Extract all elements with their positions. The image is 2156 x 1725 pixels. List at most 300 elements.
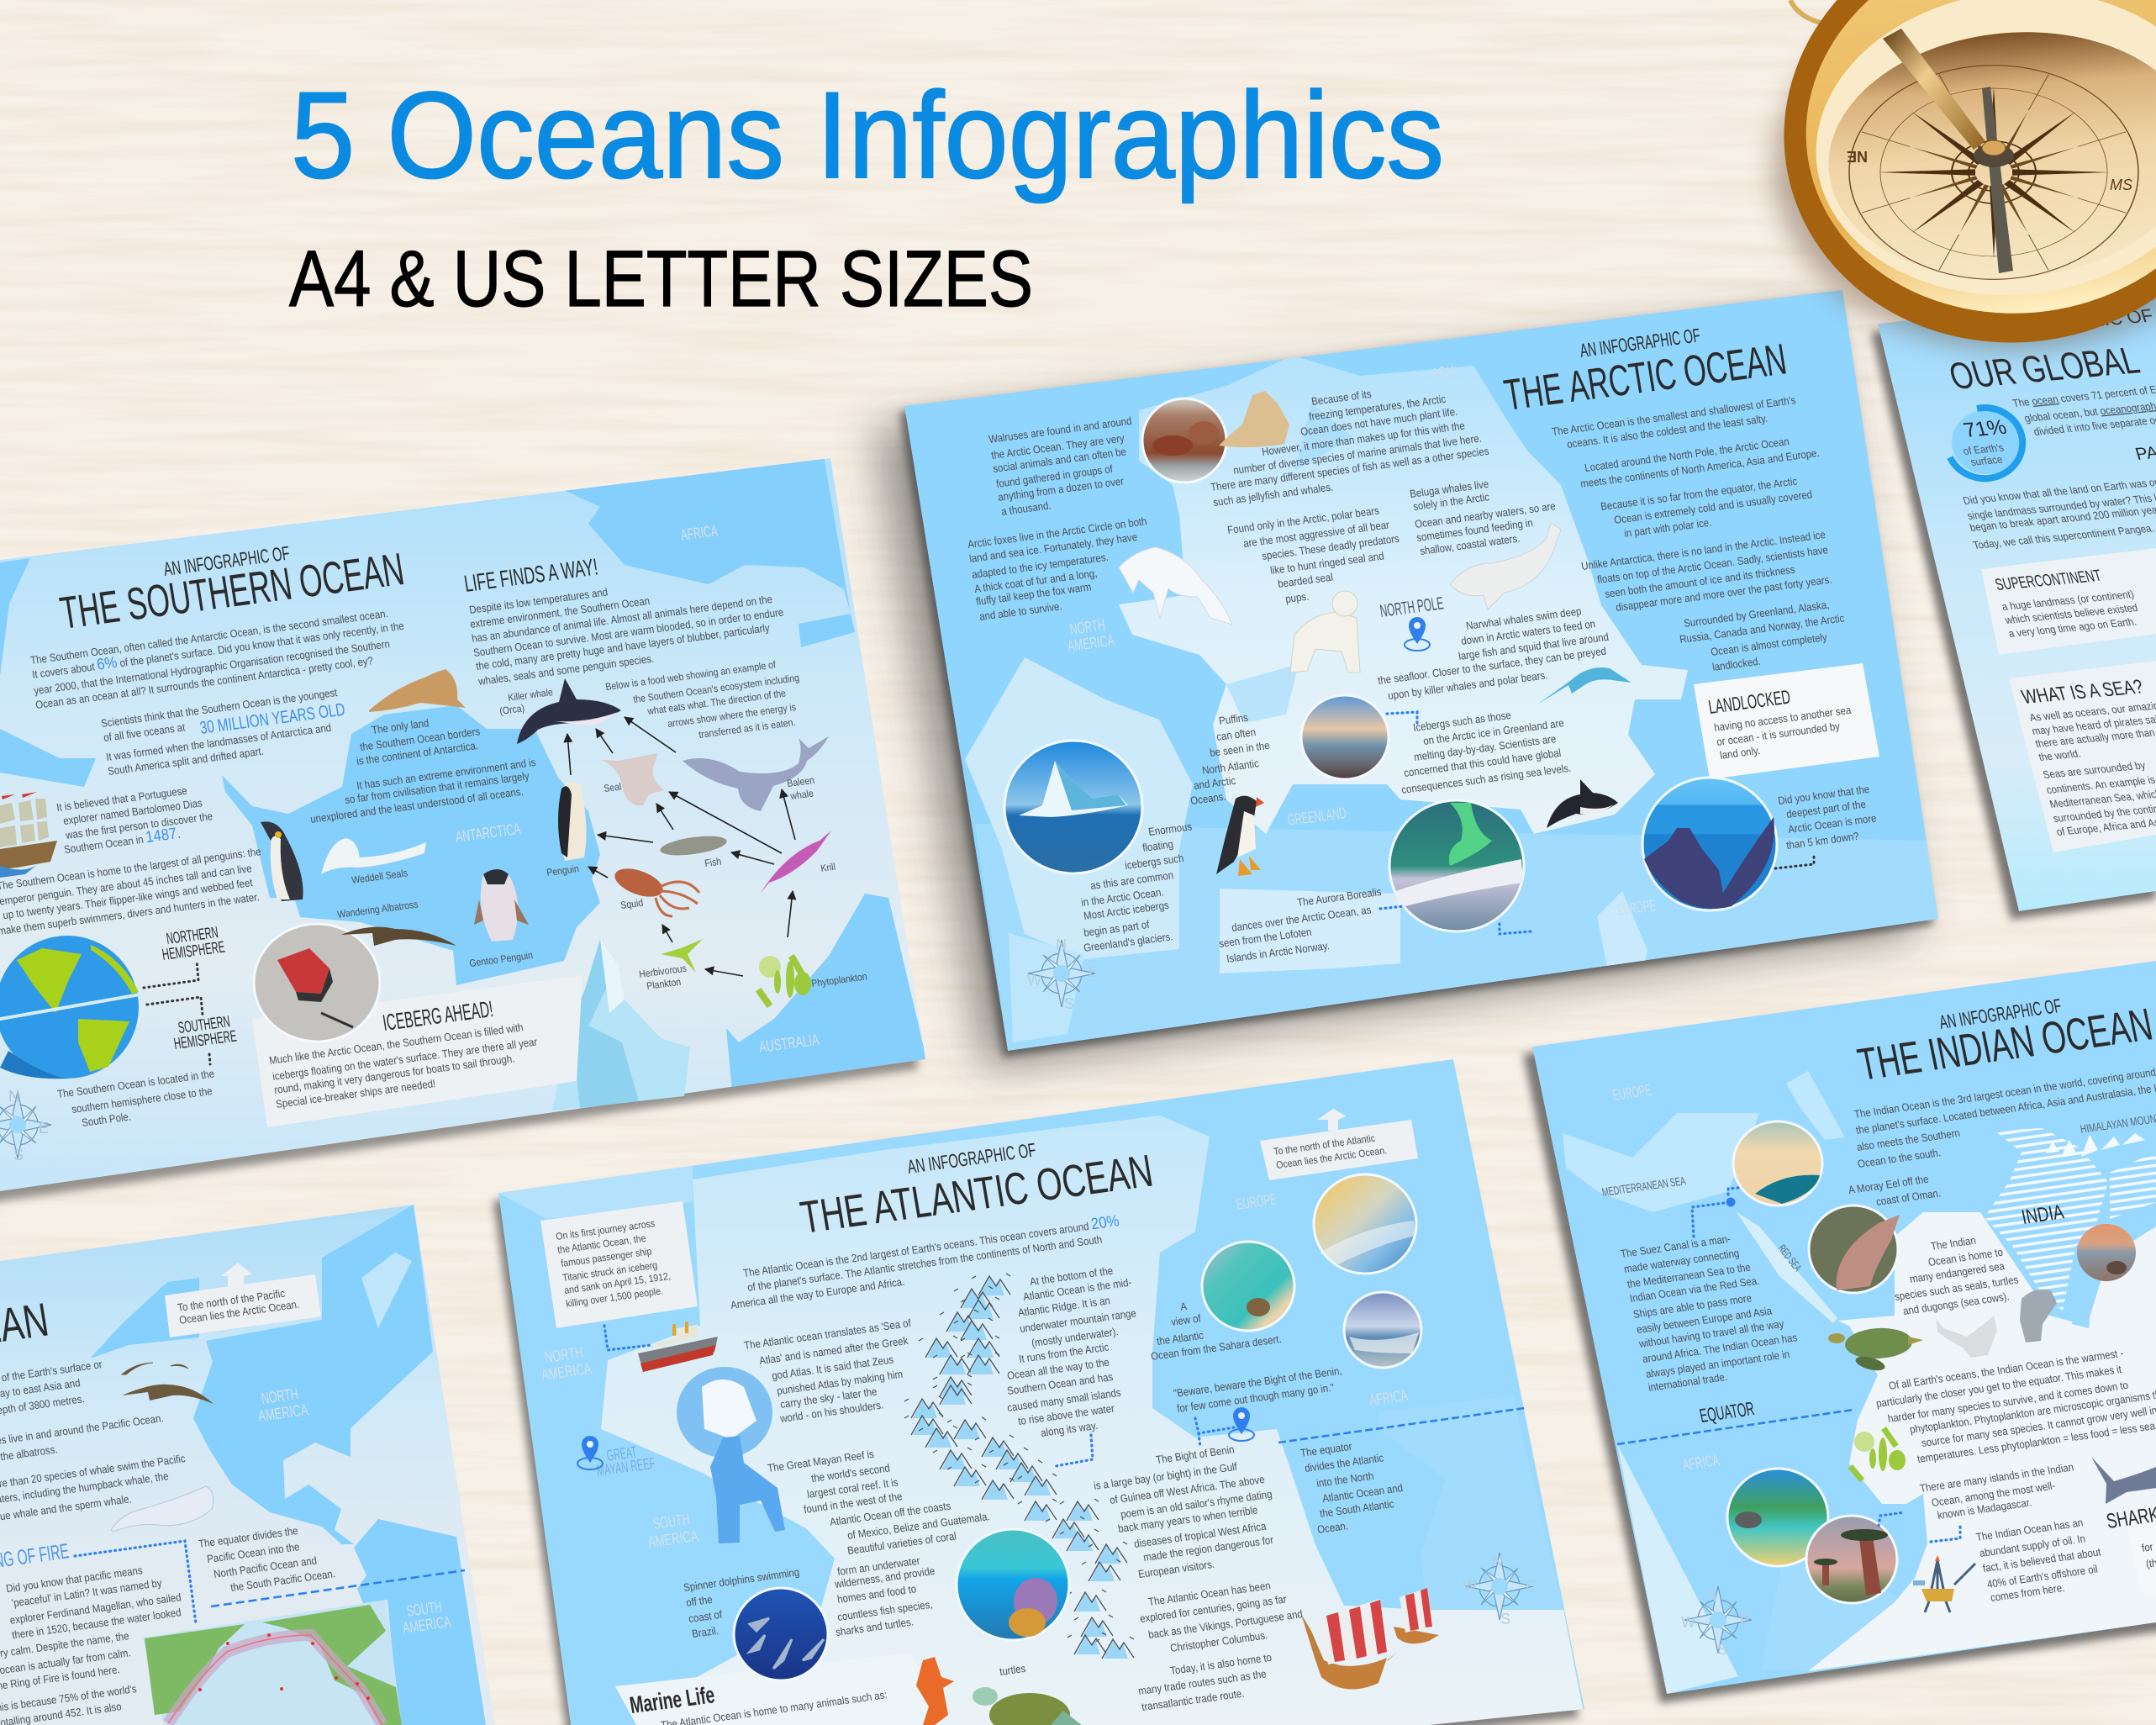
- iceberg illustration: [552, 939, 690, 1110]
- panel: Supercontinent definition: which scientists believe existed: [2003, 602, 2139, 626]
- intro text: The Arctic Ocean is the smallest and shallowest of Earth's: [1551, 393, 1796, 438]
- chart: 71 percent donut: 71%: [1961, 415, 2010, 442]
- Pangea text: [1962, 475, 2156, 551]
- chart: 71 percent donut: of Earth's: [1962, 441, 2006, 457]
- title block: AN INFOGRAPHIC OF: [906, 1139, 1037, 1178]
- world map: ring of fire: [143, 1600, 402, 1725]
- panel: Marine Life: Marine Life: [628, 1681, 716, 1718]
- intro text: Ocean to the south.: [1857, 1147, 1942, 1170]
- Great Mayan Reef text: The Great Mayan Reef is: [767, 1448, 875, 1474]
- title block: [1501, 324, 1790, 420]
- continent labels: ASIA: [1430, 362, 1458, 383]
- food web labels: Gentoo Penguin: [469, 951, 534, 969]
- title block: AN INFOGRAPHIC OF: [1937, 994, 2064, 1033]
- panel: Landlocked definition: [1694, 663, 1879, 779]
- iceberg text: Enormous: [1147, 820, 1193, 838]
- photo: Sahara beach: [1202, 1242, 1294, 1331]
- panel: Our Global Ocean sheet: [1871, 294, 2156, 920]
- beluga text: [1409, 477, 1557, 557]
- panel: sharks: for: [2141, 1541, 2154, 1554]
- Antarctica text: unexplored and the least understood of all oceans.: [309, 785, 525, 826]
- title block: THE SOUTHERN OCEAN: [57, 544, 408, 639]
- title block: AN INFOGRAPHIC OF: [1579, 324, 1701, 361]
- iceberg text: [1080, 820, 1193, 954]
- intro text: Ocean as an ocean at all? It surrounds the continent Antarctica - pretty cool, ey?: [34, 654, 374, 711]
- youngest ocean text: Scientists think that the Southern Ocean is the youngest: [100, 686, 339, 730]
- icon: compass rose: E: [1526, 1578, 1536, 1595]
- islands text: There are many islands in the Indian: [1919, 1461, 2074, 1495]
- panel: Supercontinent definition: SUPERCONTINENT: [1993, 567, 2104, 594]
- Bight of Benin text: The Bight of Benin: [1155, 1443, 1236, 1466]
- dolphins caption: coast of: [688, 1608, 724, 1625]
- food web caption: what eats what. The direction of the: [646, 688, 787, 717]
- panel: The Atlantic Ocean sheet: [493, 1059, 1586, 1725]
- intro text: Because it is so far from the equator, the Arctic: [1600, 475, 1798, 513]
- icon: compass rose: N: [1706, 1588, 1717, 1605]
- food web arrows: [567, 717, 795, 976]
- plant life text: Because of its: [1310, 388, 1373, 408]
- Bartolomeo Dias text: It is believed that a Portuguese: [55, 784, 188, 814]
- icon: compass rose: W: [1681, 1614, 1695, 1631]
- arctic fox text: land and sea ice. Fortunately, they have: [968, 530, 1138, 565]
- polar bear text: Found only in the Arctic, polar bears: [1226, 504, 1380, 536]
- continent labels: NORTH: [543, 1344, 584, 1367]
- icon: compass rose: N: [1056, 936, 1067, 953]
- location text: southern hemisphere close to the: [71, 1084, 213, 1116]
- hemisphere labels: HEMISPHERE: [173, 1027, 238, 1053]
- Sahara caption: view of: [1170, 1312, 1202, 1328]
- animal: krill: [761, 831, 831, 893]
- Great Mayan Reef text: wilderness, and provide: [833, 1564, 936, 1590]
- icon: compass rose: [1681, 1586, 1752, 1658]
- Atlas text: world - on his shoulders.: [778, 1399, 884, 1425]
- equator text: North Pacific Ocean and: [213, 1554, 318, 1580]
- intro text: seen both the amount of ice and its thickness: [1604, 563, 1796, 600]
- hemisphere labels: NORTHERN: [166, 924, 219, 948]
- iceberg text: as this are common: [1089, 869, 1174, 892]
- photo: Greenland coast: [1301, 695, 1389, 779]
- Antarctica text: so far from civilisation that it remains largely: [344, 769, 530, 806]
- walrus text: found gathered in groups of: [995, 462, 1114, 490]
- melting ice text: Icebergs such as those: [1412, 709, 1512, 734]
- title block: THE ATLANTIC OCEAN: [797, 1146, 1157, 1243]
- beluga text: Beluga whales live: [1409, 477, 1489, 500]
- ring of fire text: [0, 1564, 182, 1725]
- panel: Marine Life: turtles: [999, 1662, 1026, 1678]
- callout: Titanic: [540, 1201, 698, 1328]
- animal: squid: [611, 863, 699, 916]
- warmest ocean text: Of all Earth's oceans, the Indian Ocean is the warmest -: [1888, 1347, 2125, 1392]
- Atlas text: Atlas' and is named after the Greek: [758, 1334, 909, 1367]
- Great Mayan Reef text: the world's second: [810, 1462, 891, 1485]
- continent labels: SOUTH: [651, 1511, 691, 1533]
- equator text: divides the Atlantic: [1304, 1452, 1384, 1474]
- exploration text: back as the Vikings, Portuguese and: [1147, 1607, 1304, 1641]
- Atlas text: carry the sky - later the: [779, 1385, 878, 1411]
- panel: Supercontinent definition: a very long time ago on Earth.: [2007, 615, 2138, 640]
- intro text: [0, 1358, 186, 1524]
- continent labels: AMERICA: [402, 1613, 452, 1638]
- narwhal text: the seafloor. Closer to the surface, they can be preyed: [1377, 645, 1607, 687]
- plant life text: [1210, 388, 1489, 509]
- photo: coral reef: [957, 1529, 1069, 1640]
- food web labels: Fish: [704, 857, 722, 869]
- iceberg text: icebergs such: [1124, 852, 1184, 872]
- icon: compass rose: W: [1027, 972, 1041, 989]
- arctic fox text: [967, 515, 1147, 623]
- Antarctica text: The only land: [371, 716, 430, 736]
- panel: Landlocked definition: LANDLOCKED: [1707, 686, 1792, 718]
- iceberg text: Greenland's glaciers.: [1083, 931, 1173, 954]
- animal: gentoo penguin: [474, 869, 529, 942]
- intro text: Located around the North Pole, the Arctic Ocean: [1584, 435, 1790, 474]
- islands text: [1919, 1461, 2074, 1522]
- panel: The Southern Ocean sheet: [0, 456, 927, 1204]
- panel: Supercontinent definition: a huge landmass (or continent): [2000, 588, 2136, 613]
- mid-Atlantic ridge text: along its way.: [1040, 1419, 1099, 1439]
- animal: penguin in food web: [558, 782, 587, 861]
- panel: Iceberg ahead: [252, 975, 582, 1127]
- food web labels: Weddell Seals: [351, 868, 409, 886]
- panel: The Indian Ocean sheet: [1523, 961, 2156, 1703]
- icon: compass rose: W: [1463, 1578, 1477, 1595]
- oil text: 40% of Earth's offshore oil: [1986, 1563, 2099, 1590]
- icon: compass rose: E: [1740, 1612, 1750, 1628]
- Suez canal text: without having to travel all the way: [1637, 1317, 1785, 1350]
- photo: tropical beach: [1727, 1469, 1828, 1566]
- animal: seal: [602, 753, 664, 805]
- animal: killer whale: [517, 678, 621, 744]
- Bight of Benin text: diseases of tropical West Africa: [1133, 1520, 1268, 1550]
- hemisphere labels: SOUTHERN: [177, 1013, 231, 1037]
- life finds a way text: Despite its low temperatures and: [468, 586, 609, 616]
- food web caption: [605, 660, 800, 741]
- food web caption: arrows show where the energy is: [667, 702, 797, 730]
- Bartolomeo Dias text: was the first person to discover the: [64, 810, 213, 841]
- map labels: AFRICA: [1681, 1452, 1721, 1474]
- Atlas text: god Atlas. It is said that Zeus: [771, 1353, 894, 1382]
- continent labels: AFRICA: [1368, 1387, 1410, 1410]
- mid-Atlantic ridge text: Atlantic Ocean is the mid-: [1022, 1276, 1132, 1303]
- melting ice text: on the Arctic ice in Greenland are: [1422, 717, 1565, 747]
- Pangea text: Today, we call this supercontinent Pangea.: [1972, 522, 2155, 551]
- Sahara caption: Ocean from the Sahara desert.: [1150, 1332, 1283, 1363]
- equator text: [198, 1524, 336, 1594]
- life finds a way text: whales, seals and some penguin species.: [477, 652, 655, 688]
- animal: emperor penguin: [261, 821, 303, 901]
- map labels: MEDITERRANEAN SEA: [1600, 1174, 1687, 1199]
- endangered species text: Ocean is home to: [1927, 1246, 2004, 1269]
- location text: South Pole.: [81, 1110, 132, 1129]
- compass needle: [1883, 29, 1985, 150]
- Sahara caption: the Atlantic: [1156, 1329, 1205, 1348]
- panel: Iceberg ahead: ICEBERG AHEAD!: [381, 996, 495, 1036]
- animal: herbivorous plankton: [661, 939, 703, 973]
- map labels: [1600, 1082, 2156, 1474]
- animal: narwhal: [1537, 667, 1631, 704]
- continent labels: EUROPE: [1235, 1191, 1278, 1214]
- panel: What is a sea: Seas are surrounded by: [2042, 759, 2148, 781]
- deep ocean text: deepest part of the: [1785, 798, 1867, 820]
- callout: north of the Atlantic: [1260, 1109, 1418, 1180]
- equator text: The equator: [1299, 1440, 1352, 1459]
- Antarctica text: the Southern Ocean borders: [359, 725, 481, 753]
- aurora text: seen from the Lofoten: [1218, 926, 1312, 950]
- emperor penguin text: up to twenty years. Their flipper-like wings and webbed feet: [2, 876, 254, 921]
- puffin text: North Atlantic: [1201, 757, 1260, 777]
- life finds a way text: has an abundance of animal life. Almost all animals here depend on the: [471, 593, 773, 645]
- panel: Landlocked definition: having no access to another sea: [1713, 704, 1852, 734]
- intro text: floats on top of the Arctic Ocean. Sadly, scientists have: [1596, 543, 1829, 586]
- mid-Atlantic ridge text: Ocean all the way to the: [1006, 1356, 1110, 1382]
- intro text: in part with polar ice.: [1623, 516, 1712, 540]
- mid-Atlantic ridge mountains: [904, 1274, 1134, 1659]
- callout: Titanic: killing over 1,500 people.: [565, 1286, 664, 1310]
- dolphins caption: Brazil.: [691, 1624, 720, 1640]
- animal: albatross: [341, 927, 456, 946]
- islands text: known is Madagascar.: [1937, 1496, 2032, 1522]
- intro text: [1551, 393, 1845, 673]
- food web labels: Plankton: [646, 977, 682, 992]
- callout: north of the Atlantic: Ocean lies the Arctic Ocean.: [1275, 1146, 1388, 1171]
- melting ice text: consequences such as rising sea levels.: [1400, 762, 1572, 796]
- Great Mayan Reef text: form an underwater: [836, 1554, 921, 1578]
- panel: The Pacific Ocean sheet: [0, 1205, 495, 1725]
- brass compass: NE: [1847, 148, 1868, 165]
- callout: Titanic: the Atlantic Ocean, the: [556, 1233, 646, 1256]
- endangered species text: many endangered sea: [1909, 1260, 2006, 1285]
- Suez canal text: always played an important role in: [1645, 1348, 1790, 1380]
- Suez canal text: made waterway connecting: [1623, 1247, 1741, 1275]
- dotted connectors and equator: [604, 1326, 1525, 1466]
- connectors: [1617, 1188, 1960, 1542]
- emperor penguin text: The Southern Ocean is home to the largest of all penguins: the: [0, 845, 262, 893]
- arctic fox text: adapted to the icy temperatures.: [971, 551, 1110, 581]
- equator text: [1299, 1440, 1404, 1536]
- icon: compass rose: S: [1064, 995, 1074, 1012]
- intro text: Unlike Antarctica, there is no land in the Arctic. Instead ice: [1580, 528, 1827, 572]
- Bartolomeo Dias text: [55, 784, 213, 857]
- Bight of Benin text: made the region dangerous for: [1142, 1533, 1274, 1564]
- plant life text: However, it more than makes up for this with the: [1261, 419, 1466, 458]
- life finds a way text: LIFE FINDS A WAY!: [462, 553, 599, 597]
- photo: baobab trees: [1806, 1516, 1897, 1603]
- panel: What is a sea: the world.: [2037, 747, 2082, 763]
- animal: dugong: [2020, 1290, 2057, 1343]
- polar bear text: like to hunt ringed seal and: [1269, 550, 1385, 577]
- chart: 71 percent donut: surface: [1969, 453, 2004, 468]
- ring of fire text: Did you know that pacific means: [5, 1564, 143, 1595]
- animal: walrus: [1219, 391, 1289, 447]
- location pins: [577, 1407, 1254, 1469]
- callout: north of the Atlantic: To the north of the Atlantic: [1273, 1133, 1376, 1158]
- plant life text: Ocean does not have much plant life.: [1299, 405, 1458, 438]
- animal: sea turtle: [973, 1687, 1082, 1725]
- photo: sunset waves: [1314, 1174, 1416, 1274]
- dotted connectors: [1380, 712, 1814, 934]
- equator text: The equator divides the: [198, 1524, 299, 1550]
- warmest ocean text: [1875, 1347, 2156, 1465]
- Suez canal text: the Mediterranean Sea to the: [1626, 1261, 1752, 1290]
- food web caption: transferred as it is eaten.: [698, 717, 796, 741]
- polar bear text: species. These deadly predators: [1261, 532, 1400, 562]
- compass rose: [1849, 66, 2138, 279]
- intro text: It covers about 6% of the planet's surface. Did you know that it was only recently, in the: [30, 615, 405, 682]
- equator text: Ocean.: [1316, 1519, 1349, 1536]
- endangered species text: species such as seals, turtles: [1894, 1274, 2020, 1303]
- equator text: the South Atlantic: [1319, 1497, 1395, 1520]
- intro text: [1853, 1061, 2156, 1170]
- plant life text: There are many different species of fish as well as a other species: [1210, 445, 1489, 493]
- photo: walrus colony: [1142, 398, 1226, 483]
- youngest ocean text: [100, 686, 346, 778]
- endangered species text: and dugongs (sea cows).: [1902, 1290, 2011, 1317]
- callout: Titanic: On its first journey across: [555, 1218, 656, 1242]
- title block: [797, 1139, 1157, 1243]
- Suez canal text: The Suez Canal is a man-: [1620, 1232, 1732, 1260]
- panel: Iceberg ahead: Special ice-breaker ships are needed!: [275, 1077, 436, 1110]
- animal: albatrosses: [122, 1363, 213, 1404]
- deep ocean text: [1777, 783, 1878, 852]
- deep ocean text: Did you know that the: [1777, 783, 1870, 807]
- moray eel caption: [1848, 1173, 1942, 1208]
- intro text: year 2000, that the International Hydrographic Organisation recognised the Southern: [33, 637, 391, 697]
- narwhal text: upon by killer whales and polar bears.: [1387, 669, 1548, 702]
- map labels: EQUATOR: [1698, 1397, 1756, 1427]
- animal: shark: [2091, 1457, 2156, 1504]
- aurora text: [1218, 885, 1382, 965]
- continent labels: EUROPE: [1616, 897, 1657, 920]
- food web labels: Herbivorous: [639, 963, 688, 980]
- Suez canal text: easily between Europe and Asia: [1636, 1305, 1774, 1336]
- panel: Iceberg ahead: icebergs floating on the water's surface. They are there all year: [271, 1036, 538, 1083]
- food web labels: Killer whale: [508, 687, 554, 704]
- puffin text: and Arctic: [1193, 774, 1236, 792]
- iceberg text: floating: [1141, 838, 1174, 854]
- equator and ring connector lines: [75, 1541, 465, 1623]
- food web labels: Penguin: [546, 863, 580, 878]
- callout: Titanic: Titanic struck an iceberg: [561, 1260, 658, 1284]
- polar bear text: [1226, 504, 1400, 605]
- plant life text: such as jellyfish and whales.: [1212, 481, 1334, 509]
- equator text: the South Pacific Ocean.: [229, 1567, 336, 1594]
- icon: compass rose: S: [1500, 1611, 1510, 1627]
- Great Mayan Reef text: Beautiful varieties of coral: [846, 1530, 957, 1557]
- walrus text: [988, 414, 1133, 518]
- life finds a way text: the cold, many are pretty huge and have layers of blubber, particularly: [475, 621, 772, 673]
- rhyme quote: "Beware, beware the Bight of the Benin,: [1173, 1364, 1343, 1400]
- food web labels: Seal: [604, 782, 622, 794]
- deep ocean text: Arctic Ocean is more: [1787, 812, 1878, 836]
- Antarctica text: is the continent of Antarctica.: [356, 739, 479, 768]
- arctic fox text: A thick coat of fur and a long,: [973, 567, 1098, 595]
- intro text: America all the way to Europe and Africa.: [730, 1275, 905, 1311]
- narwhal text: [1377, 604, 1610, 702]
- oil text: [1975, 1517, 2102, 1604]
- life finds a way text: extreme environment, the Southern Ocean: [469, 594, 651, 630]
- animal: polar bear: [1290, 591, 1360, 673]
- walrus text: the Arctic Ocean. They are very: [990, 432, 1125, 462]
- dolphins caption: Spinner dolphins swimming: [683, 1566, 800, 1594]
- ring of fire text: there in 1520, because the water looked: [11, 1606, 182, 1642]
- Atlas text: The Atlantic ocean translates as 'Sea of: [743, 1316, 912, 1352]
- ring of fire text: explorer Ferdinand Magellan, who sailed: [9, 1590, 182, 1627]
- puffin text: Puffins: [1218, 711, 1249, 727]
- intro text: meets the continents of North America, Asia and Europe.: [1579, 446, 1820, 490]
- map labels: INDIA: [2020, 1200, 2066, 1229]
- animal: Weddell seal: [321, 838, 426, 874]
- aurora text: Islands in Arctic Norway.: [1226, 939, 1331, 965]
- beluga text: solely in the Arctic: [1412, 491, 1490, 513]
- Bight of Benin text: is a large bay (or bight) in the Gulf: [1093, 1460, 1238, 1492]
- food web labels: whale: [789, 789, 814, 802]
- continent labels: NORTH: [1068, 617, 1106, 639]
- mid-Atlantic ridge text: Atlantic Ridge. It is an: [1017, 1295, 1111, 1319]
- food web caption: the Southern Ocean's ecosystem including: [633, 673, 800, 705]
- narwhal text: large fish and squid that live around: [1458, 630, 1610, 662]
- icon: viking ships: [1301, 1588, 1439, 1690]
- chart: 71 percent donut: [1950, 408, 2022, 478]
- youngest ocean text: It was formed when the landmasses of Antarctica and: [105, 721, 332, 763]
- photo: stormy sea: [1344, 1292, 1421, 1368]
- icon: globe with hemispheres: [0, 936, 145, 1079]
- panel: Landlocked definition: land only.: [1719, 744, 1761, 762]
- youngest ocean text: South America split and drifted apart.: [107, 745, 265, 778]
- plant life text: freezing temperatures, the Arctic: [1308, 393, 1447, 423]
- continent labels: AFRICA: [680, 522, 720, 545]
- icon: sailing ship: [0, 792, 57, 878]
- intro text: Ocean is extremely cold and is usually covered: [1613, 488, 1813, 526]
- mid-Atlantic ridge text: It runs from the Arctic: [1018, 1341, 1110, 1365]
- exploration text: The Atlantic Ocean has been: [1147, 1580, 1272, 1608]
- callout: north of the Pacific: To the north of the Pacific: [177, 1287, 286, 1314]
- title block: THE ARCTIC OCEAN: [1501, 335, 1790, 420]
- panel: Landlocked definition: or ocean - it is surrounded by: [1716, 720, 1842, 748]
- continent labels: [1066, 362, 1657, 920]
- iceberg text: Most Arctic icebergs: [1083, 899, 1170, 922]
- illustration: Atlas holding the globe: [677, 1367, 785, 1543]
- panel: sharks: [2105, 1501, 2156, 1593]
- puffin text: Oceans.: [1189, 790, 1227, 807]
- iceberg text: begin as part of: [1083, 918, 1151, 939]
- exploration text: transatlantic trade route.: [1141, 1687, 1245, 1713]
- endangered species text: The Indian: [1930, 1234, 1977, 1253]
- ring of fire text: ocean is actually far from calm.: [0, 1646, 131, 1676]
- intro text: landlocked.: [1711, 655, 1762, 673]
- continent labels: AMERICA: [1066, 632, 1115, 656]
- intro text: [29, 607, 405, 711]
- mid-Atlantic ridge text: [1006, 1264, 1137, 1439]
- dolphins caption: [683, 1566, 800, 1640]
- photo: Indian sunset: [2077, 1224, 2136, 1281]
- emperor penguin text: emperor penguin. They are about 45 inches tall and can live: [0, 862, 253, 908]
- warmest ocean text: harder for many species to survive, and it comes down to: [1887, 1379, 2129, 1425]
- oil text: abundant supply of oil. In: [1979, 1532, 2086, 1559]
- walrus text: anything from a dozen to over: [997, 475, 1125, 504]
- emperor penguin text: make them superb swimmers, divers and hunters in the water.: [0, 890, 260, 937]
- Great Mayan Reef text: Atlantic Ocean off the coasts: [829, 1500, 951, 1528]
- arctic fox text: and able to survive.: [978, 600, 1063, 623]
- continent labels: ANTARCTICA: [455, 820, 522, 847]
- plant life text: number of diverse species of marine animals that live here.: [1232, 432, 1483, 477]
- walrus text: Walruses are found in and around: [988, 414, 1133, 446]
- Bight of Benin text: European visitors.: [1137, 1558, 1215, 1580]
- food web labels: (Orca): [499, 704, 525, 717]
- Bight of Benin text: [1093, 1443, 1274, 1580]
- animal: monk seal: [1936, 1316, 1997, 1358]
- animal: fish: [659, 833, 728, 858]
- arctic fox text: fluffy tail keep the fox warm: [975, 581, 1092, 608]
